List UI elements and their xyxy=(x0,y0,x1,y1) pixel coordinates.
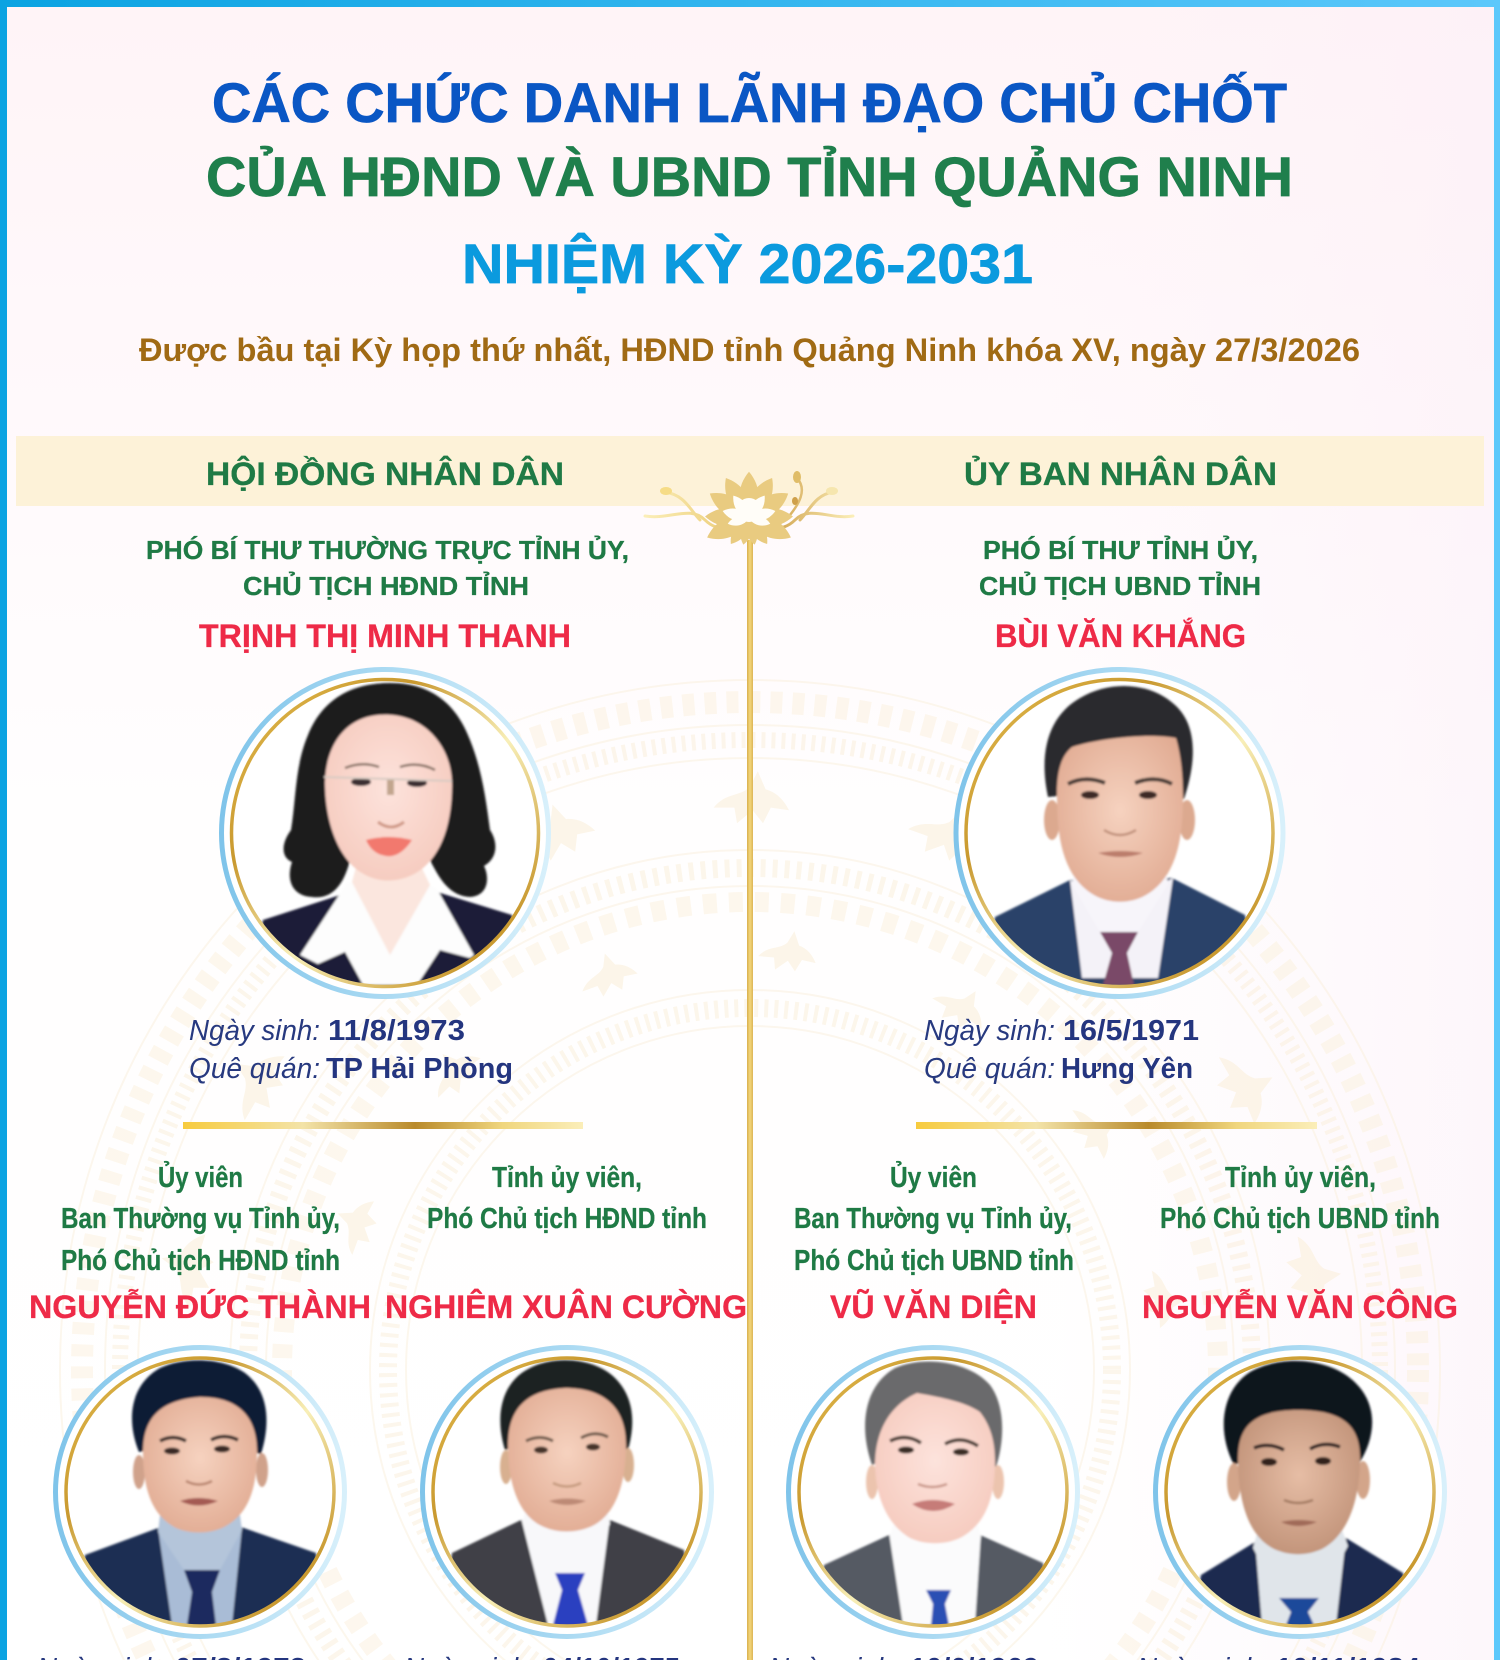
title: CÁC CHỨC DANH LÃNH ĐẠO CHỦ CHỐT xyxy=(212,71,1287,134)
role text: Phó Chủ tịch UBND tỉnh xyxy=(794,1245,1074,1277)
portrait xyxy=(422,1348,712,1640)
birth date and hometown: Quê quán: xyxy=(924,1053,1055,1085)
gold divider xyxy=(183,1122,583,1129)
title: NHIỆM KỲ 2026-2031 xyxy=(462,232,1033,295)
birth date xyxy=(1137,1653,1420,1660)
birth date and hometown: Ngày sinh: xyxy=(189,1015,320,1047)
gold divider xyxy=(916,1122,1317,1129)
panel: Nguyễn Văn Công xyxy=(1137,1162,1458,1660)
panel: Nghiêm Xuân Cường xyxy=(385,1162,747,1660)
portrait xyxy=(1156,1348,1444,1640)
portrait xyxy=(56,1348,344,1640)
birth date and hometown: Quê quán: xyxy=(189,1053,320,1085)
birth date and hometown: 16/5/1971 xyxy=(1063,1015,1199,1047)
role text xyxy=(979,534,1261,601)
title xyxy=(206,71,1293,295)
birth date and hometown: 11/8/1973 xyxy=(328,1015,465,1047)
role text: Phó Chủ tịch UBND tỉnh xyxy=(1160,1203,1440,1235)
role text: Ban Thường vụ Tỉnh ủy, xyxy=(61,1203,340,1235)
portrait xyxy=(222,670,548,1000)
role text xyxy=(427,1162,707,1235)
birth date and hometown: TP Hải Phòng xyxy=(326,1053,513,1085)
role text: PHÓ BÍ THƯ THƯỜNG TRỰC TỈNH ỦY, xyxy=(146,534,629,565)
icon: golden lotus xyxy=(645,471,853,548)
centre divider line xyxy=(747,540,753,1660)
role text: CHỦ TỊCH HĐND TỈNH xyxy=(243,570,529,601)
birth date xyxy=(769,1653,1039,1660)
role text xyxy=(146,534,629,601)
panel: Nguyễn Đức Thành xyxy=(29,1160,371,1660)
panel: Ủy ban nhân dân chairman xyxy=(916,534,1317,1129)
name: NGUYỄN ĐỨC THÀNH xyxy=(29,1289,371,1325)
birth date and hometown: Hưng Yên xyxy=(1061,1053,1193,1085)
name: BÙI VĂN KHẮNG xyxy=(995,618,1246,654)
role text xyxy=(1160,1162,1440,1235)
role text: Phó Chủ tịch HĐND tỉnh xyxy=(427,1203,707,1235)
birth date and hometown xyxy=(189,1015,513,1085)
role text: Ủy viên xyxy=(890,1160,977,1194)
birth date xyxy=(404,1653,680,1660)
birth date and hometown: Ngày sinh: xyxy=(924,1015,1055,1047)
birth date xyxy=(37,1653,306,1660)
name: NGHIÊM XUÂN CƯỜNG xyxy=(385,1289,747,1325)
portrait xyxy=(788,1348,1078,1640)
column header band: HỘI ĐỒNG NHÂN DÂN xyxy=(206,456,564,492)
birth date and hometown xyxy=(924,1015,1199,1085)
role text: Tỉnh ủy viên, xyxy=(1225,1162,1376,1194)
background emblem: bronze drum pattern xyxy=(60,680,1440,1660)
name: NGUYỄN VĂN CÔNG xyxy=(1142,1289,1458,1325)
role text: Tỉnh ủy viên, xyxy=(492,1162,642,1194)
role text xyxy=(794,1160,1074,1277)
role text: Phó Chủ tịch HĐND tỉnh xyxy=(61,1245,340,1277)
role text: PHÓ BÍ THƯ TỈNH ỦY, xyxy=(983,534,1258,565)
column header band: ỦY BAN NHÂN DÂN xyxy=(964,456,1277,492)
panel: Vũ Văn Diện xyxy=(769,1160,1078,1660)
name: VŨ VĂN DIỆN xyxy=(830,1289,1037,1325)
role text: Ban Thường vụ Tỉnh ủy, xyxy=(794,1203,1072,1235)
role text: Ủy viên xyxy=(158,1160,243,1194)
role text xyxy=(61,1160,340,1277)
title: CỦA HĐND VÀ UBND TỈNH QUẢNG NINH xyxy=(206,145,1293,208)
portrait xyxy=(956,670,1283,1000)
subtitle: Được bầu tại Kỳ họp thứ nhất, HĐND tỉnh Quảng Ninh khóa XV, ngày 27/3/2026 xyxy=(139,332,1360,368)
role text: CHỦ TỊCH UBND TỈNH xyxy=(979,570,1261,601)
panel: Hội đồng nhân dân chairperson xyxy=(146,534,629,1129)
name: TRỊNH THỊ MINH THANH xyxy=(199,618,571,654)
column header band xyxy=(16,436,1484,506)
